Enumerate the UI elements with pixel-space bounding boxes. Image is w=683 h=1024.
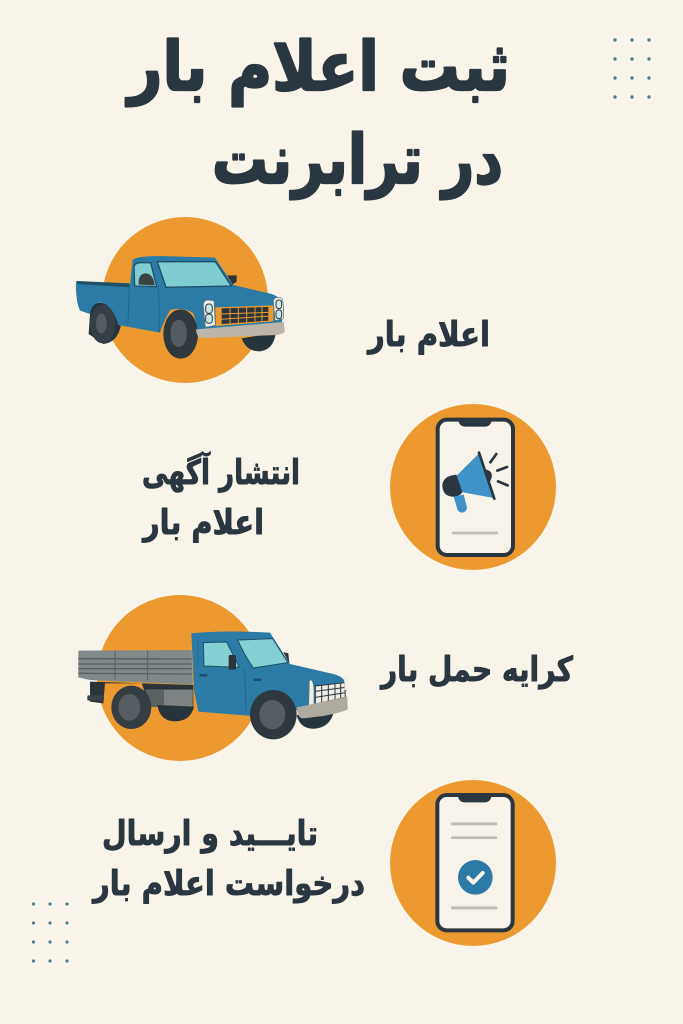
- step 1 label: اعلام بار: [366, 315, 490, 355]
- step 4 label: تایـــید و ارسال: [102, 814, 318, 854]
- step 2 label: اعلام بار: [141, 503, 264, 543]
- title: [125, 28, 510, 200]
- dot pattern: bottom left: [32, 902, 69, 963]
- step 4 label: درخواست اعلام بار: [91, 864, 365, 904]
- step 3 illustration: blue cargo truck on orange circle: [78, 595, 348, 761]
- step 2 label: انتشار آگهی: [142, 451, 300, 493]
- step 2 label: [141, 451, 300, 543]
- step 3 label: کرایه حمل بار: [379, 650, 573, 690]
- title: ثبت اعلام بار: [125, 28, 510, 107]
- step 4 illustration: phone with check mark on orange circle: [390, 780, 556, 946]
- dot pattern: top right: [613, 38, 651, 99]
- step 1 illustration: blue pickup on orange circle: [76, 217, 285, 383]
- title: در ترابرنت: [212, 121, 503, 200]
- step 4 label: [91, 814, 365, 904]
- step 2 illustration: phone with megaphone on orange circle: [390, 404, 556, 570]
